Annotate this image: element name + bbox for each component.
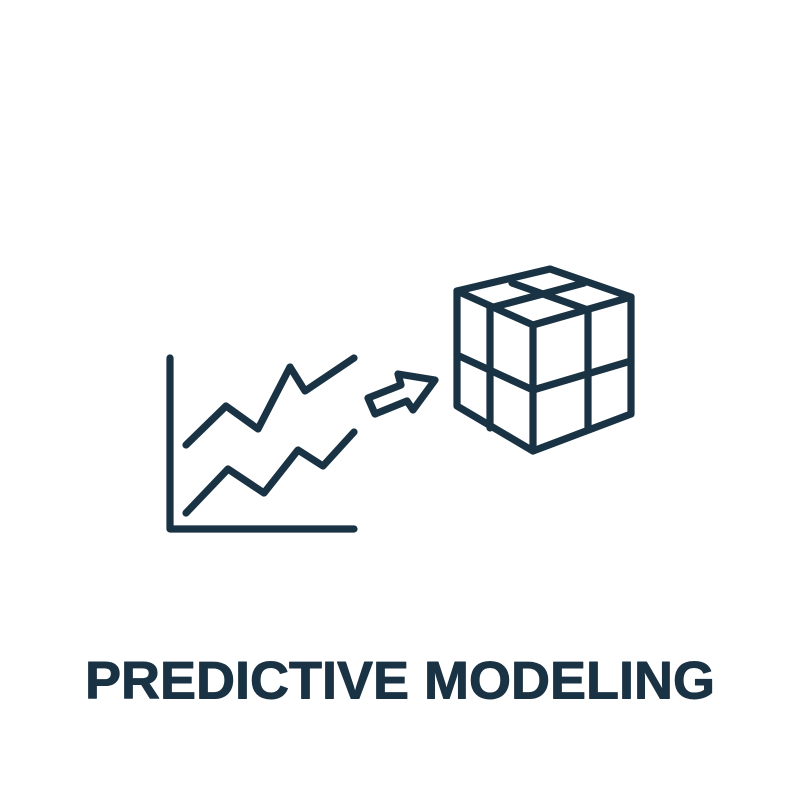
icon: arrow: [368, 374, 435, 414]
cube outline: [457, 269, 631, 451]
lower trend line: [186, 432, 354, 513]
cube top grid: [490, 283, 588, 310]
cube side verticals: [490, 308, 588, 430]
chart axes: [170, 358, 354, 529]
icon: line chart: [170, 358, 354, 529]
icon: cube: [457, 269, 631, 451]
title: PREDICTIVE MODELING: [85, 652, 715, 710]
upper trend line: [186, 358, 354, 445]
cube front edges: [457, 291, 631, 451]
cube side horizontals: [457, 355, 631, 390]
